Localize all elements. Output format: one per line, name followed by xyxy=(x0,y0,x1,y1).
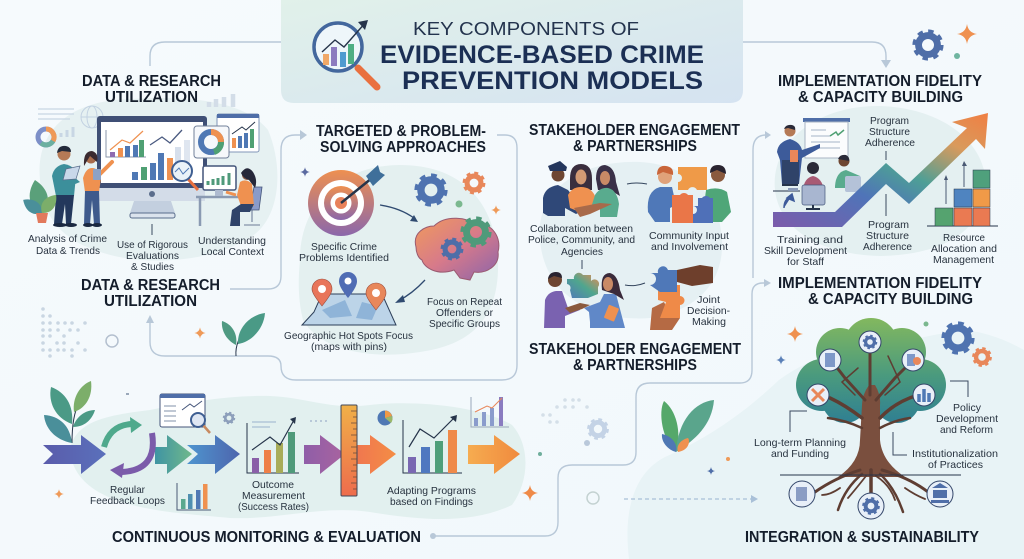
heading repeated xyxy=(778,275,983,308)
labels: Use of Rigorous xyxy=(117,239,188,251)
labels: Agencies xyxy=(561,246,603,258)
icon: report window with magnifier xyxy=(160,394,210,433)
heading: DATA & RESEARCH xyxy=(82,73,221,90)
labels: Feedback Loops xyxy=(90,495,165,507)
decorative sparkles xyxy=(707,322,928,475)
panel: data and research utilization xyxy=(20,73,277,310)
labels: Focus on Repeat xyxy=(427,296,502,308)
illustration: community puzzle xyxy=(648,165,731,223)
labels: Measurement xyxy=(242,490,305,502)
illustration: woman at desk xyxy=(196,166,262,226)
labels: of Practices xyxy=(928,459,983,471)
labels: Training and xyxy=(777,234,843,246)
panel: integration and sustainability xyxy=(707,318,998,546)
labels: Adherence xyxy=(865,137,915,149)
labels xyxy=(754,402,998,471)
heading repeated: UTILIZATION xyxy=(104,293,197,310)
labels xyxy=(28,224,266,273)
labels: Joint xyxy=(697,294,720,306)
labels: (Success Rates) xyxy=(238,501,309,513)
heading repeated: & PARTNERSHIPS xyxy=(573,357,697,374)
chart: stacked blocks xyxy=(927,161,998,226)
labels xyxy=(528,223,730,328)
chart: small bars xyxy=(177,483,211,510)
illustration: seated learners xyxy=(773,155,861,209)
labels xyxy=(764,115,997,268)
labels: Making xyxy=(692,316,726,328)
heading repeated: STAKEHOLDER ENGAGEMENT xyxy=(529,341,741,358)
leader lines xyxy=(790,381,968,455)
labels: Specific Groups xyxy=(429,318,500,330)
labels: Evaluations xyxy=(126,250,179,262)
chart: rising arrow xyxy=(773,113,988,227)
illustration: man with tablet xyxy=(52,146,80,227)
panel: stakeholder engagement and partnerships xyxy=(528,122,741,374)
heading repeated: & CAPACITY BUILDING xyxy=(808,291,973,308)
labels: Data & Trends xyxy=(36,245,100,257)
labels: Decision- xyxy=(687,305,730,317)
illustration: woman pointing xyxy=(83,151,112,227)
icon: feedback cycle arrows xyxy=(104,417,153,478)
labels: Management xyxy=(933,254,994,266)
chart: faint bars xyxy=(471,397,509,427)
icon: small pie xyxy=(378,410,392,426)
labels: (maps with pins) xyxy=(311,341,387,353)
illustration: trainer at board xyxy=(777,118,850,186)
labels: and Funding xyxy=(771,448,829,460)
labels: Adherence xyxy=(863,241,912,253)
labels: Long-term Planning xyxy=(754,437,846,449)
panel: targeted and problem-solving approaches xyxy=(284,123,502,355)
heading: CONTINUOUS MONITORING & EVALUATION xyxy=(112,529,421,546)
icon: ruler xyxy=(341,405,357,496)
labels: Structure xyxy=(866,230,909,242)
icon: brain with gears xyxy=(415,218,499,280)
icons on the tree xyxy=(789,331,953,519)
labels: Skill Development xyxy=(764,245,847,257)
icon: potted plant xyxy=(20,178,61,223)
heading: SOLVING APPROACHES xyxy=(320,139,486,156)
labels: Adapting Programs xyxy=(387,485,476,497)
heading: UTILIZATION xyxy=(105,89,198,106)
tree trunk and roots xyxy=(815,350,928,512)
connector lines xyxy=(146,42,891,539)
labels: Collaboration between xyxy=(530,223,633,235)
icon: gears xyxy=(944,324,991,366)
icon: gears xyxy=(417,173,501,215)
labels: for Staff xyxy=(787,256,824,268)
icon: faint gear xyxy=(224,413,234,423)
heading xyxy=(82,73,221,106)
heading: INTEGRATION & SUSTAINABILITY xyxy=(745,529,980,546)
arrows xyxy=(43,435,520,474)
heading xyxy=(778,73,983,106)
panel: implementation fidelity and capacity building xyxy=(764,24,998,308)
blob xyxy=(540,162,722,318)
blob xyxy=(775,106,986,256)
labels: and Involvement xyxy=(651,241,728,253)
labels: Regular xyxy=(110,484,145,496)
blob xyxy=(40,98,277,261)
labels: Program xyxy=(870,115,909,127)
icon: leaf plant xyxy=(661,400,714,452)
heading repeated xyxy=(529,341,741,374)
labels: Policy xyxy=(953,402,982,414)
blob xyxy=(299,165,498,355)
illustration: police, community, agency handshake xyxy=(543,161,620,217)
title text: KEY COMPONENTS OF xyxy=(413,18,639,39)
labels: based on Findings xyxy=(390,496,473,508)
heading repeated: IMPLEMENTATION FIDELITY xyxy=(778,275,983,292)
labels: Program xyxy=(868,219,909,231)
labels: Outcome xyxy=(252,479,294,491)
labels: Structure xyxy=(869,126,910,138)
connector xyxy=(627,183,647,184)
title panel xyxy=(281,0,743,103)
heading xyxy=(316,123,486,156)
icon: chart window xyxy=(217,114,259,152)
labels: Offenders or xyxy=(436,307,493,319)
icon: plant on arrow xyxy=(44,381,95,443)
icon: magnifier with chart xyxy=(314,20,377,87)
chart: outcome bars xyxy=(247,417,299,473)
arrow xyxy=(395,280,425,303)
icon: target with arrow xyxy=(300,165,385,236)
heading: IMPLEMENTATION FIDELITY xyxy=(778,73,983,90)
labels: Specific Crime xyxy=(311,241,377,253)
labels xyxy=(284,241,502,353)
connector xyxy=(625,283,645,286)
blob xyxy=(70,396,526,519)
labels: & Studies xyxy=(131,261,174,273)
labels xyxy=(90,479,476,513)
icon: large monitor with charts xyxy=(97,116,207,218)
heading repeated xyxy=(81,277,220,310)
title text xyxy=(380,18,704,95)
tree canopy xyxy=(796,318,946,423)
labels: Community Input xyxy=(649,230,729,242)
labels: Development xyxy=(936,413,998,425)
heading xyxy=(529,122,740,155)
icon: gear and sparkle xyxy=(914,24,977,59)
labels: Institutionalization xyxy=(912,448,998,460)
heading: STAKEHOLDER ENGAGEMENT xyxy=(529,122,740,139)
heading: & PARTNERSHIPS xyxy=(573,138,697,155)
title text: PREVENTION MODELS xyxy=(402,67,703,95)
heading: TARGETED & PROBLEM- xyxy=(316,123,486,140)
labels: Analysis of Crime xyxy=(28,233,107,245)
labels: Police, Community, and xyxy=(528,234,635,246)
arrow xyxy=(380,205,418,222)
background wash: lower right xyxy=(627,331,1024,559)
title text: EVIDENCE-BASED CRIME xyxy=(380,41,704,69)
icon glyphs xyxy=(796,336,949,514)
icon: donut card xyxy=(194,126,229,158)
labels: and Reform xyxy=(940,424,993,436)
illustration: handshake with puzzle xyxy=(544,272,625,328)
labels: Geographic Hot Spots Focus xyxy=(284,330,413,342)
icon: map with pins xyxy=(302,272,396,325)
chart: adapted programs bars xyxy=(403,415,462,473)
labels: Allocation and xyxy=(931,243,997,255)
panel: continuous monitoring and evaluation xyxy=(43,381,526,546)
icon: sprout on connector xyxy=(222,313,265,356)
illustration: hand joining puzzle pieces xyxy=(650,265,713,330)
heading repeated: DATA & RESEARCH xyxy=(81,277,220,294)
labels: Problems Identified xyxy=(299,252,389,264)
labels: Understanding xyxy=(198,235,266,247)
icon: faint list, globe, donut xyxy=(38,94,233,145)
labels: Local Context xyxy=(201,246,264,258)
heading: & CAPACITY BUILDING xyxy=(798,89,963,106)
labels: Resource xyxy=(943,232,985,244)
decorative accents: left and center xyxy=(41,307,607,504)
ground line xyxy=(780,474,961,476)
